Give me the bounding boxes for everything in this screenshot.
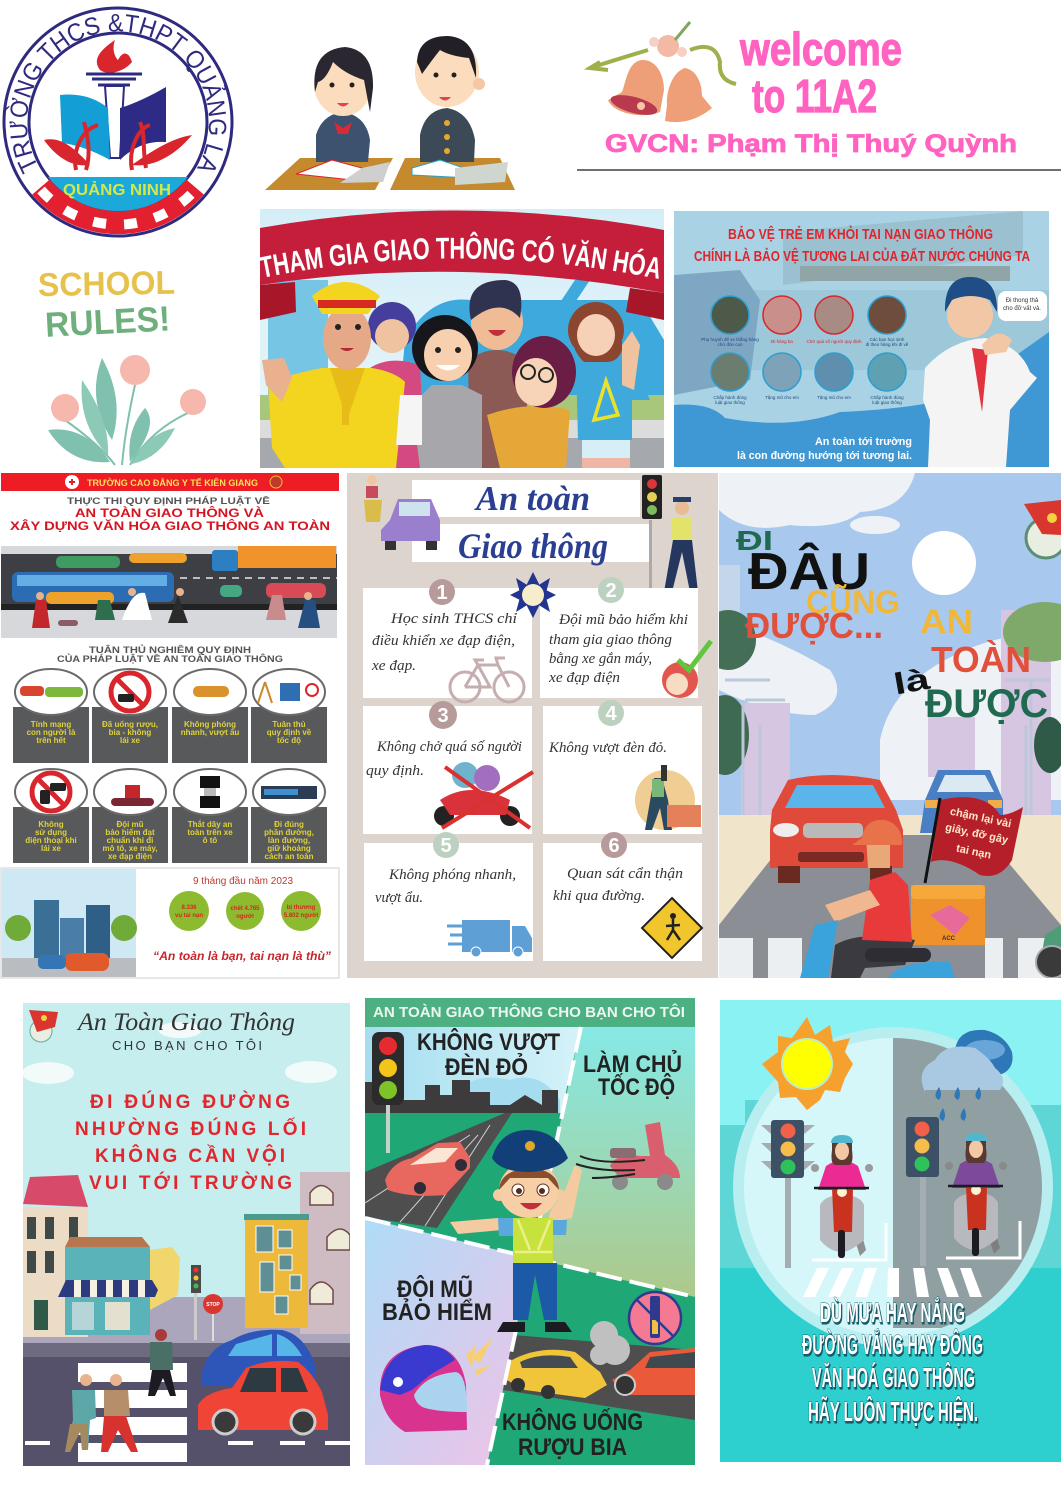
photo captions: Chở quá số người quy định (807, 338, 862, 344)
icon: helmet with check mark (662, 641, 711, 698)
rule tile row 2: Thắt dây an (188, 820, 232, 829)
stat circles: 5.802 người (284, 913, 318, 919)
rule tile row 2: phần đường, (264, 828, 314, 837)
stat circles (169, 891, 321, 931)
poster slogan (737, 436, 912, 462)
photo captions: Tặng mũ cho em (765, 395, 799, 400)
poster heading: AN TOÀN GIAO THÔNG VÀ (75, 505, 264, 520)
photo captions: chờ đón con (718, 342, 743, 347)
rule tile row 2: chuẩn khi đi (107, 836, 153, 845)
number badges (429, 577, 627, 858)
college header bar (1, 473, 339, 491)
rule tile row 1: nhanh, vượt ẩu (181, 728, 239, 737)
heading: school rules (38, 264, 175, 345)
poster words: ĐỘI MŨ (397, 1275, 473, 1303)
rule texts: Không chở quá số người (376, 739, 522, 755)
heading: teacher name: GVCN: Phạm Thị Thuý Quỳnh (605, 130, 1017, 158)
rule texts: tham gia giao thông (549, 632, 672, 648)
heading words: AN (920, 603, 973, 641)
panel: protect children poster (674, 211, 1049, 467)
panel: rain or shine poster (720, 1000, 1061, 1462)
rule tile row 1: con người là (27, 728, 76, 737)
panel: Kien Giang college poster (0, 473, 340, 978)
rule tile row 2: ô tô (203, 836, 217, 845)
poster heading: BẢO VỆ TRẺ EM KHỎI TAI NẠN GIAO THÔNG (728, 225, 993, 243)
rule texts (366, 611, 688, 906)
large circle outer ring (733, 1027, 1053, 1347)
smoke (590, 1321, 630, 1365)
scooter rider (800, 820, 955, 978)
banner title: THAM GIA GIAO THÔNG CÓ VĂN HÓA (260, 232, 659, 279)
delivery box (911, 885, 985, 945)
street signal (191, 1265, 201, 1340)
panel: six traffic rules poster (347, 473, 718, 978)
logo: school emblem (2, 6, 234, 238)
rule tile row 2: xe đạp điện (108, 852, 152, 861)
poster slogan: là con đường hướng tới tương lai. (737, 450, 912, 462)
rule tile row 2: lái xe (41, 844, 62, 853)
clouds (22, 1022, 337, 1084)
rule tile row 2: Đi đúng (274, 820, 304, 829)
sunny half (744, 1038, 1042, 1336)
stop sign (203, 1294, 223, 1341)
red car (770, 775, 903, 883)
rule texts: điều khiển xe đạp điện, (372, 633, 515, 649)
photo captions: luật giao thông (872, 400, 902, 405)
road dividers (365, 1027, 695, 1465)
pedestrians (65, 1329, 176, 1452)
rule tile row 2: Đội mũ (116, 820, 144, 829)
helmet icon (380, 1345, 467, 1432)
heading words: TOÀN (931, 639, 1031, 680)
policeman (450, 1130, 582, 1332)
poster heading (10, 495, 330, 533)
icon: pedestrian crossing sign (642, 898, 702, 958)
poster words: ĐÈN ĐỎ (445, 1052, 528, 1081)
sand pavements (719, 815, 1061, 925)
no alcohol sign (629, 1292, 681, 1344)
rule tile row 2: toàn trên xe (187, 828, 233, 837)
rule texts: Không phóng nhanh, (388, 867, 516, 883)
rule texts: xe đạp điện (548, 670, 620, 686)
delivery box: ACC (942, 936, 956, 942)
youth badge (1024, 500, 1061, 558)
person: purple-haired woman (368, 302, 422, 468)
boy in helmet (923, 277, 1037, 467)
youth badge (29, 1010, 58, 1042)
rule texts: Không vượt đèn đỏ. (548, 740, 667, 756)
crosswalk stripes (719, 938, 1052, 978)
flag with slogan: chậm lại vài (949, 806, 1012, 830)
flag with slogan: tai nạn (955, 843, 992, 862)
number badges: 6 (608, 835, 620, 857)
crashed red car (612, 1348, 695, 1395)
speeding scooter (576, 1122, 680, 1190)
street scene (1, 546, 337, 638)
stop sign: STOP (206, 1302, 220, 1308)
red slogan: VUI TỚI TRƯỜNG (89, 1172, 292, 1194)
rule texts: Quan sát cẩn thận (567, 866, 683, 882)
quote: “An toàn là bạn, tai nạn là thù” (153, 951, 331, 963)
rule tile row 1: Tính mạng (31, 720, 71, 729)
rule texts: quy định. (366, 763, 424, 779)
poster heading: THỰC THI QUY ĐỊNH PHÁP LUẬT VỀ (67, 495, 270, 507)
rule tile row 2: giữ khoảng (267, 844, 311, 853)
number badges: 1 (436, 582, 448, 604)
section heading: TUÂN THỦ NGHIÊM QUY ĐỊNH (89, 644, 251, 655)
panel: traffic rules with policeman (365, 998, 695, 1465)
rule tile row 1: Tuân thủ (272, 720, 306, 729)
rain cloud (922, 1030, 1013, 1121)
poster title (458, 479, 608, 566)
poster words: KHÔNG UỐNG (502, 1408, 643, 1436)
college header bar: TRƯỜNG CAO ĐẲNG Y TẾ KIÊN GIANG (87, 477, 258, 489)
icon: traffic controller (635, 765, 701, 830)
crashed yellow car (503, 1350, 607, 1399)
title bars (412, 480, 650, 562)
right buildings (244, 1172, 350, 1334)
stat circles: chết 4.765 (230, 905, 260, 912)
icon: scooter rider (364, 475, 382, 522)
rule tile row 2: mô tô, xe máy, (103, 844, 157, 853)
top left quadrant: sky, city and road (365, 1027, 581, 1228)
background city and bridge (260, 280, 664, 468)
rule tile row 2: sử dụng (35, 828, 67, 837)
flag with slogan (925, 797, 1023, 883)
poster title: An toàn (474, 479, 590, 518)
slogan (802, 1297, 983, 1427)
script title: An Toàn Giao Thông (76, 1009, 295, 1036)
grey back street (23, 1297, 350, 1347)
number badges: 2 (605, 580, 617, 602)
section heading (57, 644, 283, 664)
heading words (736, 525, 1048, 726)
right traffic light (906, 1117, 939, 1266)
poster words: LÀM CHỦ (583, 1049, 682, 1078)
top right quadrant (531, 1027, 695, 1297)
stat heading: 9 tháng đầu năm 2023 (193, 875, 293, 887)
speech bubble: cho đỡ vất vả. (1003, 306, 1041, 312)
blue car (920, 770, 1003, 833)
photo captions: luật giao thông (715, 400, 745, 405)
panel: traffic safety for you and me (22, 1003, 350, 1466)
rainy half (744, 1038, 1042, 1336)
street lamps (725, 678, 1050, 815)
blue wave footer (674, 332, 1049, 467)
rule tile row 2: bảo hiểm đạt (105, 828, 155, 837)
sun (762, 1017, 853, 1110)
road (719, 835, 1061, 978)
rule tile row 2: cách an toàn (265, 852, 314, 861)
header bar: AN TOÀN GIAO THÔNG CHO BẠN CHO TÔI (373, 1003, 685, 1021)
panel: culture in traffic banner (260, 209, 664, 468)
rule tile row 1 (13, 669, 327, 763)
speech bubble: Đi thong thả (1006, 298, 1039, 304)
red arched ribbon (260, 210, 664, 293)
poster slogan: An toàn tới trường (815, 436, 912, 448)
rule tile row 1: trên hết (36, 736, 66, 745)
rule tile row 2: điện thoại khi (25, 836, 77, 845)
statistics box (1, 868, 339, 978)
poster heading: XÂY DỰNG VĂN HÓA GIAO THÔNG AN TOÀN (10, 518, 330, 533)
heading: school rules: SCHOOL (38, 264, 175, 303)
rule tile row 2: Không (38, 820, 64, 829)
person: woman with glasses (487, 336, 576, 468)
rider right (945, 1133, 1020, 1258)
panel: go anywhere safety poster (700, 473, 1061, 978)
photo captions: Chấp hành đúng (870, 395, 904, 400)
rule tile row 1: Không phóng (184, 720, 236, 729)
stat circles: bị thương (287, 905, 316, 911)
rule tile row 1: Đã uống rượu, (102, 720, 158, 729)
divider rule (577, 169, 1061, 171)
icon: purple car (381, 499, 440, 550)
heading words: ĐƯỢC (925, 682, 1048, 726)
heading: class name: to 11A2 (752, 70, 877, 122)
person: man in brown (468, 280, 530, 468)
rule tile row 1: quy định về (267, 728, 312, 737)
stat circles: 8.336 (181, 905, 197, 911)
rule tile row 2 (13, 769, 327, 863)
rule tile row 2: làn đường, (268, 836, 310, 845)
distant city silhouette (720, 1100, 1061, 1268)
icon: delivery truck (447, 920, 532, 957)
lane and zebra markings (25, 1363, 350, 1462)
red slogan: KHÔNG CẦN VỘI (95, 1145, 285, 1167)
poster words: KHÔNG VƯỢT (417, 1028, 560, 1056)
rule texts: bằng xe gắn máy, (549, 651, 652, 667)
rule texts: xe đạp. (371, 658, 416, 674)
heading: school rules: RULES! (44, 299, 171, 345)
illustration: two students at desks (265, 36, 515, 190)
red slogan (75, 1091, 306, 1194)
rule texts: khi qua đường. (553, 888, 645, 904)
icon: overloaded motorbike crossed out (434, 762, 533, 828)
blue car (202, 1330, 316, 1385)
pavement and road (23, 1343, 350, 1357)
flag with slogan: giây, đỡ gây (944, 822, 1010, 847)
clouds (719, 473, 1061, 800)
number badges: 3 (437, 705, 449, 727)
person: curly boy in vest (396, 315, 482, 468)
rule texts: vượt ẩu. (375, 890, 423, 906)
stat circles: người (236, 914, 254, 920)
red car (385, 1142, 470, 1196)
heading words: là (891, 663, 933, 701)
poster words: TỐC ĐỘ (598, 1073, 675, 1101)
poster title: Giao thông (458, 526, 608, 566)
ribbon tails (260, 282, 664, 320)
bottom left quadrant (365, 1218, 531, 1465)
icon: flower (510, 572, 556, 618)
header bar (365, 998, 695, 1027)
photo captions: Tặng mũ cho em (817, 395, 851, 400)
rule tile row 1: lái xe (120, 736, 141, 745)
illustration: tulips (48, 355, 206, 465)
icon: bicycle (450, 658, 524, 702)
red slogan: NHƯỜNG ĐÚNG LỐI (75, 1118, 306, 1140)
subtitle: CHO BẠN CHO TÔI (112, 1038, 262, 1053)
photo captions: Các bạn học sinh (870, 337, 905, 342)
moon (912, 531, 976, 595)
person: right woman in teal (568, 302, 650, 468)
section heading: CỦA PHÁP LUẬT VỀ AN TOÀN GIAO THÔNG (57, 653, 283, 664)
partial scooter right (1036, 925, 1061, 978)
rule tile row 1: tốc độ (277, 736, 301, 745)
speech bubble (998, 291, 1047, 321)
bottom right road (503, 1335, 695, 1420)
city silhouettes (718, 565, 1051, 820)
zebra crossing (803, 1268, 982, 1297)
photo captions: Chấp hành đúng (713, 395, 747, 400)
stat circles: vụ tai nạn (175, 913, 203, 919)
photo captions (701, 336, 909, 405)
left traffic light (761, 1120, 815, 1268)
illustration: bells and bow (590, 22, 736, 122)
rule texts: Đội mũ bảo hiểm khi (558, 612, 688, 628)
left buildings (23, 1175, 180, 1337)
trees (700, 602, 1061, 775)
poster words: RƯỢU BIA (518, 1434, 627, 1461)
number badges: 5 (440, 835, 452, 857)
rule tile row 1: bia - không (109, 728, 151, 737)
poster words: BẢO HIỂM (382, 1297, 492, 1326)
ground (720, 1268, 1061, 1462)
heading words: ĐI (736, 525, 773, 556)
rider left (811, 1135, 886, 1260)
poster words (382, 1028, 682, 1461)
poster heading (694, 225, 1030, 265)
burst marks (466, 1337, 493, 1376)
red car (198, 1361, 328, 1434)
heading words: CŨNG (806, 584, 900, 620)
heading words: ĐƯỢC... (745, 605, 883, 646)
rule texts: Học sinh THCS chỉ (390, 611, 518, 627)
rule cards (363, 588, 702, 961)
photo captions: Phụ huynh để xe thẳng hàng (701, 336, 759, 342)
photo captions: đi theo hàng khi đi về (866, 342, 909, 347)
logo ring text: TRƯỜNG THCS &THPT QUẢNG LA (6, 14, 226, 174)
number badges: 4 (605, 703, 617, 725)
photo captions: Đi hàng ba (771, 339, 793, 344)
traffic light icon (372, 1032, 404, 1153)
heading words: ĐÂU (748, 542, 870, 601)
school gate backdrop (783, 211, 1023, 285)
heading: welcome: welcome (739, 23, 902, 75)
red slogan: ĐI ĐÚNG ĐƯỜNG (90, 1091, 290, 1113)
photo circles (711, 296, 906, 391)
icon: traffic light and officer (640, 475, 698, 595)
logo label: QUẢNG NINH (63, 180, 171, 199)
person: traffic officer (262, 282, 405, 468)
